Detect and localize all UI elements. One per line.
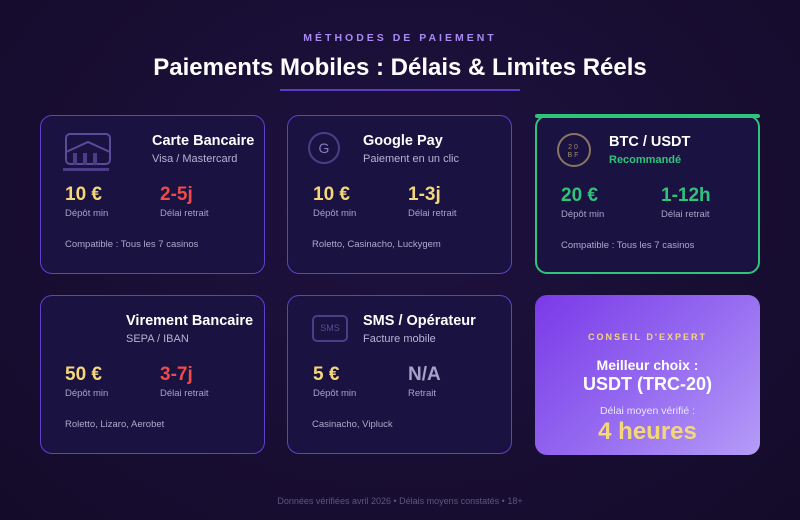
panel: virement: Roletto, Lizaro, Aerobet [65, 419, 164, 430]
panel: google pay: Google Pay [363, 133, 443, 149]
callout: conseil [535, 295, 760, 455]
panel: virement: SEPA / IBAN [126, 333, 189, 345]
subtitle: MÉTHODES DE PAIEMENT [303, 32, 497, 44]
panel: virement: 50 € [65, 364, 102, 385]
title: Paiements Mobiles : Délais & Limites Réels [153, 54, 647, 81]
panel: carte bancaire: Carte Bancaire [152, 133, 254, 149]
panel: google pay: Délai retrait [408, 208, 457, 219]
panel: sms [287, 295, 512, 454]
panel: google pay: 1-3j [408, 184, 441, 205]
panel: btc usdt: Délai retrait [661, 209, 710, 220]
panel: google pay: Dépôt min [313, 208, 356, 219]
callout: conseil: Meilleur choix : [597, 357, 698, 373]
panel: sms: SMS / Opérateur [363, 313, 476, 329]
icon: G: G [319, 140, 329, 156]
panel: sms: Dépôt min [313, 388, 356, 399]
panel: carte bancaire [40, 115, 265, 274]
panel: sms: Casinacho, Vipluck [312, 419, 393, 430]
panel: virement: Délai retrait [160, 388, 209, 399]
icon: sms: SMS [320, 323, 340, 333]
panel: google pay: Paiement en un clic [363, 153, 459, 165]
callout: conseil: CONSEIL D'EXPERT [588, 332, 707, 342]
callout: conseil: Délai moyen vérifié : [600, 405, 695, 417]
panel: carte bancaire: Compatible : Tous les 7 casinos [65, 239, 198, 250]
icon: G [308, 132, 340, 164]
icon: card [63, 133, 111, 171]
panel: btc usdt: Recommandé [609, 154, 681, 166]
panel: btc usdt [535, 115, 760, 274]
panel: carte bancaire: Délai retrait [160, 208, 209, 219]
panel: sms: Retrait [408, 388, 436, 399]
icon: sms [312, 315, 348, 342]
panel: btc usdt: Compatible : Tous les 7 casinos [561, 240, 694, 251]
panel: virement [40, 295, 265, 454]
panel: google pay: 10 € [313, 184, 350, 205]
panel: btc usdt: BTC / USDT [609, 134, 690, 150]
icon: btc: BF [568, 152, 580, 159]
icon: btc: 20 [568, 144, 580, 151]
callout: conseil: USDT (TRC-20) [583, 374, 712, 394]
panel: carte bancaire: 10 € [65, 184, 102, 205]
panel: virement: Dépôt min [65, 388, 108, 399]
panel: btc usdt: 1-12h [661, 185, 711, 206]
panel: virement: Virement Bancaire [126, 313, 253, 329]
icon: btc [557, 133, 591, 167]
panel: carte bancaire: Dépôt min [65, 208, 108, 219]
panel: btc usdt: Dépôt min [561, 209, 604, 220]
callout: conseil: 4 heures [598, 418, 697, 445]
panel: sms: 5 € [313, 364, 339, 385]
panel: google pay: Roletto, Casinacho, Luckygem [312, 239, 441, 250]
panel: carte bancaire: 2-5j [160, 184, 193, 205]
panel: virement: 3-7j [160, 364, 193, 385]
footer: Données vérifiées avril 2026 • Délais moyens constatés • 18+ [277, 496, 523, 506]
panel: google pay [287, 115, 512, 274]
panel: sms: N/A [408, 364, 441, 385]
panel: btc usdt: 20 € [561, 185, 598, 206]
panel: sms: Facture mobile [363, 333, 436, 345]
panel: carte bancaire: Visa / Mastercard [152, 153, 237, 165]
